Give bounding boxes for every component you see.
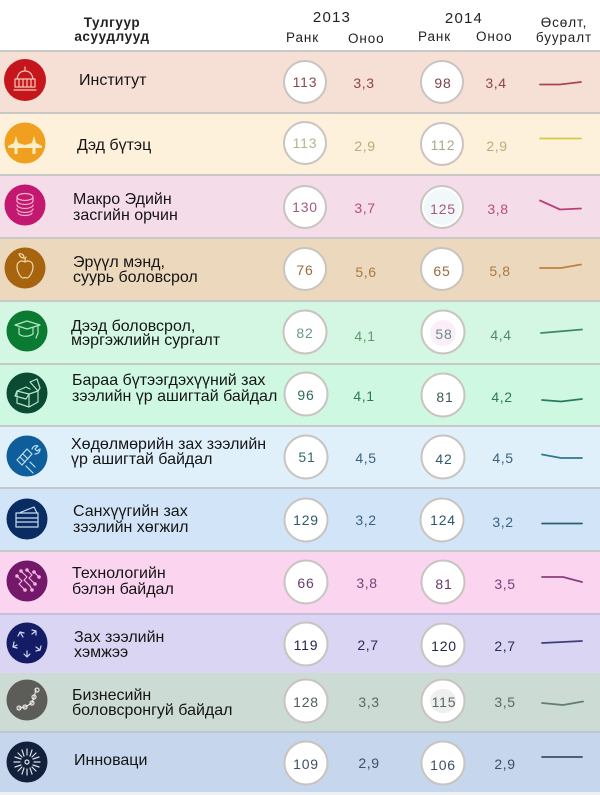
label: зээлийн үр ашигтай байдал — [72, 388, 277, 405]
trend line — [542, 702, 583, 705]
heading: 2013 score: Оноо — [348, 31, 385, 46]
2013 rank — [284, 560, 328, 604]
row: Зах зээлийн хэмжээ — [0, 613, 600, 673]
2014 rank: 112 — [431, 137, 455, 153]
label: суурь боловсрол — [73, 269, 198, 286]
row: Эрүүл мэнд, суурь боловсрол — [0, 237, 600, 300]
2013 rank: 129 — [293, 512, 319, 528]
2013 score: 3,3 — [358, 694, 380, 710]
heading: 2014 rank: Ранк — [418, 29, 451, 44]
2013 score: 3,2 — [355, 512, 377, 528]
2014 rank: 120 — [431, 638, 457, 654]
2014 rank — [421, 123, 463, 165]
2013 score: 2,9 — [354, 138, 376, 154]
2013 rank — [284, 310, 326, 354]
2013 score: 3,8 — [356, 575, 378, 591]
label: мэргэжлийн сургалт — [71, 332, 221, 349]
2013 rank — [284, 622, 328, 666]
trend line — [540, 138, 581, 140]
2014 score: 2,7 — [494, 638, 516, 654]
2014 rank — [422, 310, 464, 354]
row: Дээд боловсрол, мэргэжлийн сургалт — [0, 300, 600, 363]
icon: graduation cap — [6, 310, 48, 352]
label: үр ашигтай байдал — [71, 451, 212, 468]
icon: spark — [6, 742, 48, 782]
2014 rank: 81 — [435, 576, 453, 592]
trend line — [542, 641, 582, 643]
row: Дэд бүтэц — [0, 112, 600, 175]
2014 score: 2,9 — [486, 138, 508, 154]
heading: 2014 score: Оноо — [476, 29, 513, 44]
2013 rank: 76 — [296, 262, 314, 278]
2014 rank — [422, 742, 464, 784]
label: боловсронгуй байдал — [72, 702, 232, 719]
label: Институт — [79, 72, 147, 89]
2013 score: 3,3 — [353, 75, 375, 91]
2014 rank: 106 — [430, 757, 456, 773]
2013 score: 4,5 — [355, 450, 377, 466]
label: Хөдөлмөрийн зах зээлийн — [71, 436, 266, 453]
row: Санхүүгийн зах зээлийн хөгжил — [0, 487, 600, 550]
2014 rank: 124 — [430, 512, 456, 528]
label: Зах зээлийн — [74, 629, 164, 646]
label: бэлэн байдал — [72, 581, 174, 598]
heading: pillars: Тулгуур — [84, 15, 140, 30]
icon: bridge — [4, 122, 46, 164]
trend line — [542, 454, 582, 458]
heading: 2014: 2014 — [445, 10, 483, 27]
heading: pillars: асуудлууд — [74, 29, 150, 44]
trend line — [540, 82, 581, 84]
2013 rank: 66 — [297, 575, 315, 591]
label: Инноваци — [74, 752, 147, 769]
row: Бараа бүтээгдэхүүний зах зээлийн үр ашигтай байдал — [0, 363, 600, 426]
heading: 2013: 2013 — [313, 9, 351, 26]
icon: circuit — [6, 560, 48, 602]
2013 rank: 82 — [296, 325, 314, 341]
2014 rank: 81 — [436, 389, 454, 405]
2013 rank — [284, 122, 326, 164]
icon: network line — [6, 680, 48, 720]
2014 rank: 42 — [435, 451, 453, 467]
trend line — [542, 399, 582, 402]
icon: box — [6, 372, 48, 414]
trend line — [540, 200, 581, 210]
label: зээлийн хөгжил — [73, 519, 189, 536]
2014 rank: 115 — [432, 694, 456, 710]
2014 rank — [421, 186, 463, 228]
2014 score: 2,9 — [494, 756, 516, 772]
2013 rank: 119 — [294, 637, 318, 653]
label: Дээд боловсрол, — [71, 318, 195, 335]
2013 rank: 96 — [297, 387, 315, 403]
trend line — [541, 330, 582, 333]
icon: coins — [4, 184, 46, 226]
icon: tools — [6, 436, 48, 476]
table header — [74, 9, 592, 46]
2014 rank: 98 — [434, 75, 452, 91]
2013 score: 4,1 — [353, 388, 375, 404]
2013 rank: 130 — [292, 199, 318, 215]
2014 score: 3,8 — [487, 201, 509, 217]
2013 rank — [284, 680, 328, 722]
icon: credit cards — [6, 498, 48, 540]
2013 rank: 113 — [293, 74, 317, 90]
2014 rank — [422, 374, 464, 416]
2013 rank: 113 — [293, 135, 317, 151]
2014 rank: 58 — [435, 326, 453, 342]
2014 rank — [422, 560, 464, 604]
label: Макро Эдийн — [73, 191, 172, 208]
2014 rank: 125 — [430, 201, 456, 217]
2013 rank: 128 — [293, 694, 319, 710]
label: Эрүүл мэнд, — [73, 254, 165, 271]
row: Институт — [0, 50, 600, 113]
2013 rank — [284, 61, 326, 103]
label: засгийн орчин — [73, 207, 178, 224]
heading: 2013 rank: Ранк — [286, 30, 319, 45]
label: хэмжээ — [74, 644, 128, 661]
2013 score: 3,7 — [354, 200, 376, 216]
2013 rank: 109 — [293, 756, 319, 772]
2013 score: 4,1 — [354, 328, 376, 344]
2014 rank: 65 — [433, 263, 451, 279]
row: Технологийн бэлэн байдал — [0, 550, 600, 613]
2014 rank — [422, 624, 464, 666]
2014 score: 4,5 — [492, 450, 514, 466]
2014 rank — [422, 680, 464, 722]
label: Бараа бүтээгдэхүүний зах — [72, 372, 265, 389]
2014 rank — [421, 248, 463, 290]
2013 rank — [284, 498, 328, 542]
icon: government building — [4, 59, 46, 101]
row: Инноваци — [0, 731, 600, 792]
2014 score: 3,5 — [494, 694, 516, 710]
2013 rank — [284, 372, 328, 416]
2014 rank — [420, 498, 464, 542]
label: Санхүүгийн зах — [73, 503, 188, 520]
row: Хөдөлмөрийн зах зээлийн үр ашигтай байдал — [0, 425, 600, 488]
2013 score: 5,6 — [355, 264, 377, 280]
2014 score: 3,4 — [485, 75, 507, 91]
label: Дэд бүтэц — [77, 137, 151, 154]
2014 score: 4,2 — [491, 389, 513, 405]
label: Бизнесийн — [72, 687, 151, 704]
icon: arrows outward — [6, 622, 48, 664]
2013 rank — [284, 436, 328, 478]
heading: growth: Өсөлт, — [541, 15, 587, 30]
trend line — [542, 522, 582, 524]
2014 score: 3,2 — [492, 514, 514, 530]
trend line — [542, 756, 582, 758]
heading: growth: бууралт — [536, 30, 592, 45]
trend line — [542, 577, 582, 582]
trend line — [540, 264, 581, 268]
2013 rank — [284, 742, 328, 784]
label: Технологийн — [72, 565, 166, 582]
icon: apple — [4, 248, 46, 288]
2013 rank — [284, 186, 326, 228]
2013 score: 2,7 — [357, 637, 379, 653]
row: Макро Эдийн засгийн орчин — [0, 174, 600, 237]
row: Бизнесийн боловсронгуй байдал — [0, 673, 600, 732]
2014 score: 3,5 — [494, 576, 516, 592]
2014 rank — [422, 436, 464, 478]
2014 score: 5,8 — [489, 263, 511, 279]
2014 score: 4,4 — [490, 327, 512, 343]
2013 rank: 51 — [298, 449, 316, 465]
2013 rank — [284, 248, 326, 290]
2014 rank — [421, 61, 463, 103]
2013 score: 2,9 — [358, 755, 380, 771]
